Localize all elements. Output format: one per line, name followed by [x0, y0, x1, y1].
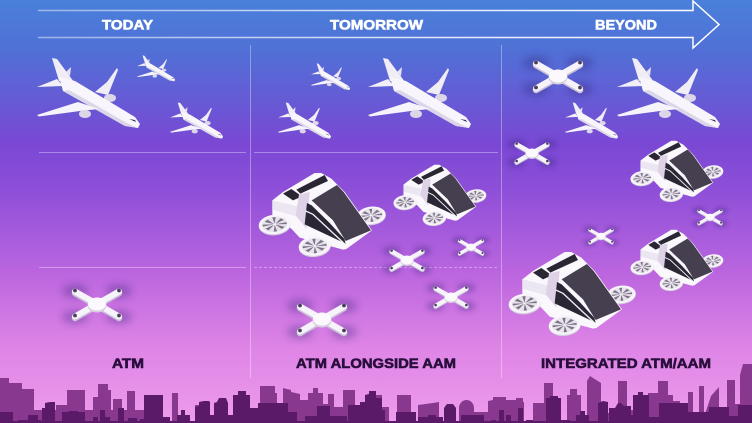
plane: large: [37, 58, 140, 128]
drone: right: [692, 207, 728, 227]
panel: beyond: [508, 56, 728, 371]
label: ATM alongside AAM: ATM ALONGSIDE AAM: [296, 355, 456, 371]
eVTOL: upper: [630, 141, 724, 203]
plane: small lower: [170, 103, 223, 139]
heading: tomorrow: TOMORROW: [330, 16, 424, 32]
plane: small top: [311, 63, 350, 90]
drone: right: [426, 283, 476, 311]
column headings: [102, 16, 657, 32]
plane: large: [617, 58, 720, 128]
plane: small top: [137, 55, 175, 81]
plane: large: [368, 58, 471, 128]
heading: beyond: BEYOND: [595, 16, 657, 32]
plane: small lower: [278, 103, 331, 139]
skyline: back layer: [0, 364, 752, 423]
label: integrated ATM/AAM: INTEGRATED ATM/AAM: [541, 355, 711, 371]
skyline: front layer: [0, 391, 752, 423]
drone: mid: [382, 246, 432, 274]
drone: [62, 284, 132, 324]
drone: large: [287, 299, 357, 339]
eVTOL: lower: [630, 230, 724, 292]
eVTOL: large: [508, 252, 637, 338]
plane: small: [565, 103, 618, 139]
panel: tomorrow: [258, 58, 489, 371]
eVTOL: large: [258, 173, 387, 259]
drone: centre: [584, 226, 618, 246]
city skyline: [0, 364, 752, 423]
panel: today: [37, 55, 223, 371]
drone: large: [523, 56, 593, 96]
eVTOL: small: [393, 165, 487, 227]
drone: small: [453, 237, 489, 257]
label: ATM: ATM: [112, 355, 144, 371]
timeline arrow: [38, 1, 719, 48]
drone: left: [508, 139, 556, 167]
heading: today: TODAY: [102, 16, 154, 32]
